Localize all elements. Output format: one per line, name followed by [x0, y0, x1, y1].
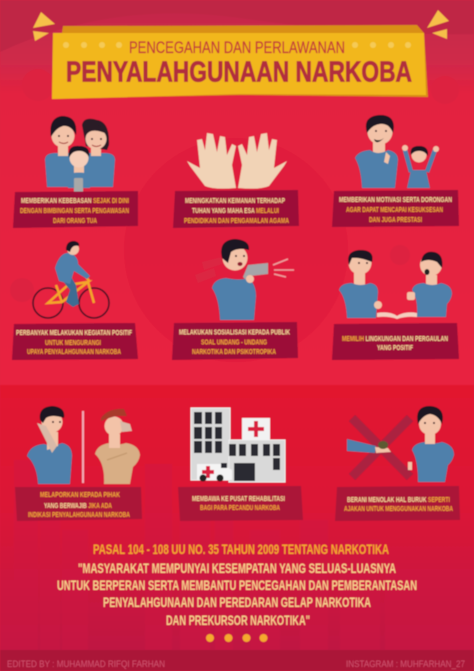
panel: motivation [332, 115, 459, 227]
caption [172, 322, 298, 360]
caption [12, 323, 138, 360]
caption [335, 486, 460, 521]
icon: man and cheering child [355, 115, 439, 188]
panel: refuse [335, 406, 460, 521]
icon: family [45, 116, 115, 193]
caption: PENDIDIKAN DAN PENGAMALAN AGAMA [184, 216, 289, 225]
caption: DARI ORANG TUA [53, 216, 97, 225]
caption [173, 190, 299, 228]
panel: rehabilitation [178, 408, 303, 521]
caption: NARKOTIKA DAN PSIKOTROPIKA [192, 347, 276, 356]
caption: SOAL UNDANG - UNDANG [201, 338, 267, 346]
caption: MEMBAWA KE PUSAT REHABILITASI [192, 494, 285, 503]
caption [13, 191, 138, 228]
pagination dots [206, 634, 268, 642]
editor credit: EDITED BY : MUHAMMAD RIFQI FARHAN [7, 659, 165, 670]
caption: MELAKUKAN SOSIALISASI KEPADA PUBLIK [179, 328, 290, 336]
title banner [52, 25, 428, 99]
legal quote [57, 542, 417, 628]
icon: hospital and ambulance [191, 408, 285, 482]
caption: MEMBERIKAN KEBEBASAN SEJAK DI DINI [21, 196, 129, 205]
caption: YANG POSITIF [377, 343, 413, 352]
caption: YANG BERWAJIB JIKA ADA [44, 501, 112, 510]
icon: cyclist [33, 241, 109, 318]
icon: two people and book [339, 250, 452, 319]
icon: crossed out offer [347, 406, 454, 482]
caption [332, 190, 459, 227]
skyline [0, 460, 474, 650]
caption: DAN JUGA PRESTASI [369, 215, 422, 224]
caption: BAGI PARA PECANDU NARKOBA [200, 503, 280, 512]
caption: PERBANYAK MELAKUKAN KEGIATAN POSITIF [16, 328, 132, 337]
panel: family guidance [13, 116, 138, 228]
caption: DENGAN BIMBINGAN SERTA PENGAWASAN [20, 206, 129, 215]
panel: socialization [172, 239, 298, 360]
caption: MELAPORKAN KEPADA PIHAK [40, 490, 120, 499]
decorative sparks left [33, 12, 55, 41]
caption [15, 487, 142, 521]
decorative sparks right [427, 10, 449, 39]
panel: positive environment [332, 250, 459, 360]
quote line 4: DAN PREKURSOR NARKOTIKA" [166, 613, 310, 628]
panel: report to authorities [15, 406, 142, 521]
title line 1: PENCEGAHAN DAN PERLAWANAN [129, 39, 345, 57]
icon: raised hands [187, 133, 287, 189]
footer credits [7, 659, 465, 670]
icon: citizen and officer [27, 406, 140, 484]
caption: UPAYA PENYALAHGUNAAN NARKOBA [27, 347, 121, 356]
caption: UNTUK MENGURANGI [45, 338, 101, 347]
panel: cycling [12, 241, 138, 360]
icon: man with megaphone [195, 239, 294, 320]
caption [332, 323, 459, 360]
caption: MENINGKATKAN KEIMANAN TERHADAP [185, 196, 285, 205]
caption: TUHAN YANG MAHA ESA MELALUI [192, 206, 279, 215]
caption: BERANI MENOLAK HAL BURUK SEPERTI [347, 495, 450, 504]
caption: INDIKASI PENYALAHGUNAAN NARKOBA [28, 510, 130, 519]
caption [178, 486, 303, 521]
panel: faith [173, 133, 299, 228]
